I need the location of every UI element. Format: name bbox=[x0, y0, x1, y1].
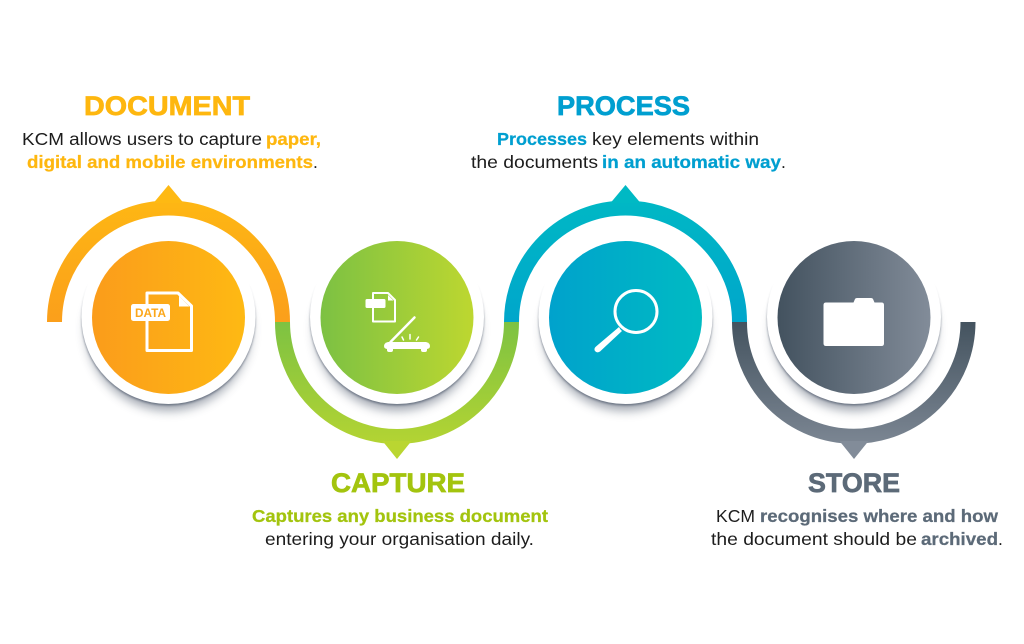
text block: process bbox=[471, 129, 786, 172]
text block: store: the document should be bbox=[711, 529, 917, 549]
icon: folder bbox=[824, 298, 884, 346]
heading: capture: CAPTURE bbox=[331, 468, 465, 498]
text block: store: . bbox=[998, 529, 1003, 549]
text block: document: paper, bbox=[266, 129, 321, 149]
panel: process step bbox=[471, 91, 786, 411]
circle: process bbox=[538, 230, 712, 411]
arc: store bbox=[740, 322, 968, 459]
text block: document bbox=[22, 129, 321, 172]
text block: process: key elements within bbox=[592, 129, 759, 149]
text block: process: . bbox=[781, 152, 786, 172]
icon: scanner with document bbox=[366, 293, 430, 352]
icon: data document: DATA bbox=[135, 308, 166, 320]
text block: capture: Captures any business document bbox=[252, 506, 548, 526]
text block: store: KCM bbox=[716, 506, 755, 526]
icon: magnifier bbox=[594, 290, 657, 352]
text block: capture: entering your organisation daily. bbox=[265, 529, 534, 549]
heading: store: STORE bbox=[808, 468, 900, 498]
arc: process bbox=[512, 185, 740, 322]
text block: store: recognises where and how bbox=[760, 506, 998, 526]
panel: document step bbox=[22, 91, 321, 411]
circle: document bbox=[82, 230, 256, 411]
circle: store bbox=[767, 230, 941, 411]
text block: store: archived bbox=[921, 529, 998, 549]
arc: capture bbox=[282, 322, 512, 459]
heading: process: PROCESS bbox=[557, 91, 690, 121]
text block: document: digital and mobile environments bbox=[27, 152, 313, 172]
circle: capture bbox=[310, 230, 484, 411]
text block: document: . bbox=[313, 152, 318, 172]
text block: process: Processes bbox=[497, 129, 587, 149]
arc: document bbox=[54, 185, 282, 322]
text block: capture bbox=[252, 506, 548, 549]
icon: data document bbox=[131, 293, 192, 350]
text block: document: KCM allows users to capture bbox=[22, 129, 262, 149]
text block: process: in an automatic way bbox=[602, 152, 781, 172]
text block: process: the documents bbox=[471, 152, 598, 172]
panel: store step bbox=[711, 230, 1003, 549]
heading: document: DOCUMENT bbox=[84, 91, 251, 121]
panel: capture step bbox=[252, 230, 548, 549]
text block: store bbox=[711, 506, 1003, 549]
